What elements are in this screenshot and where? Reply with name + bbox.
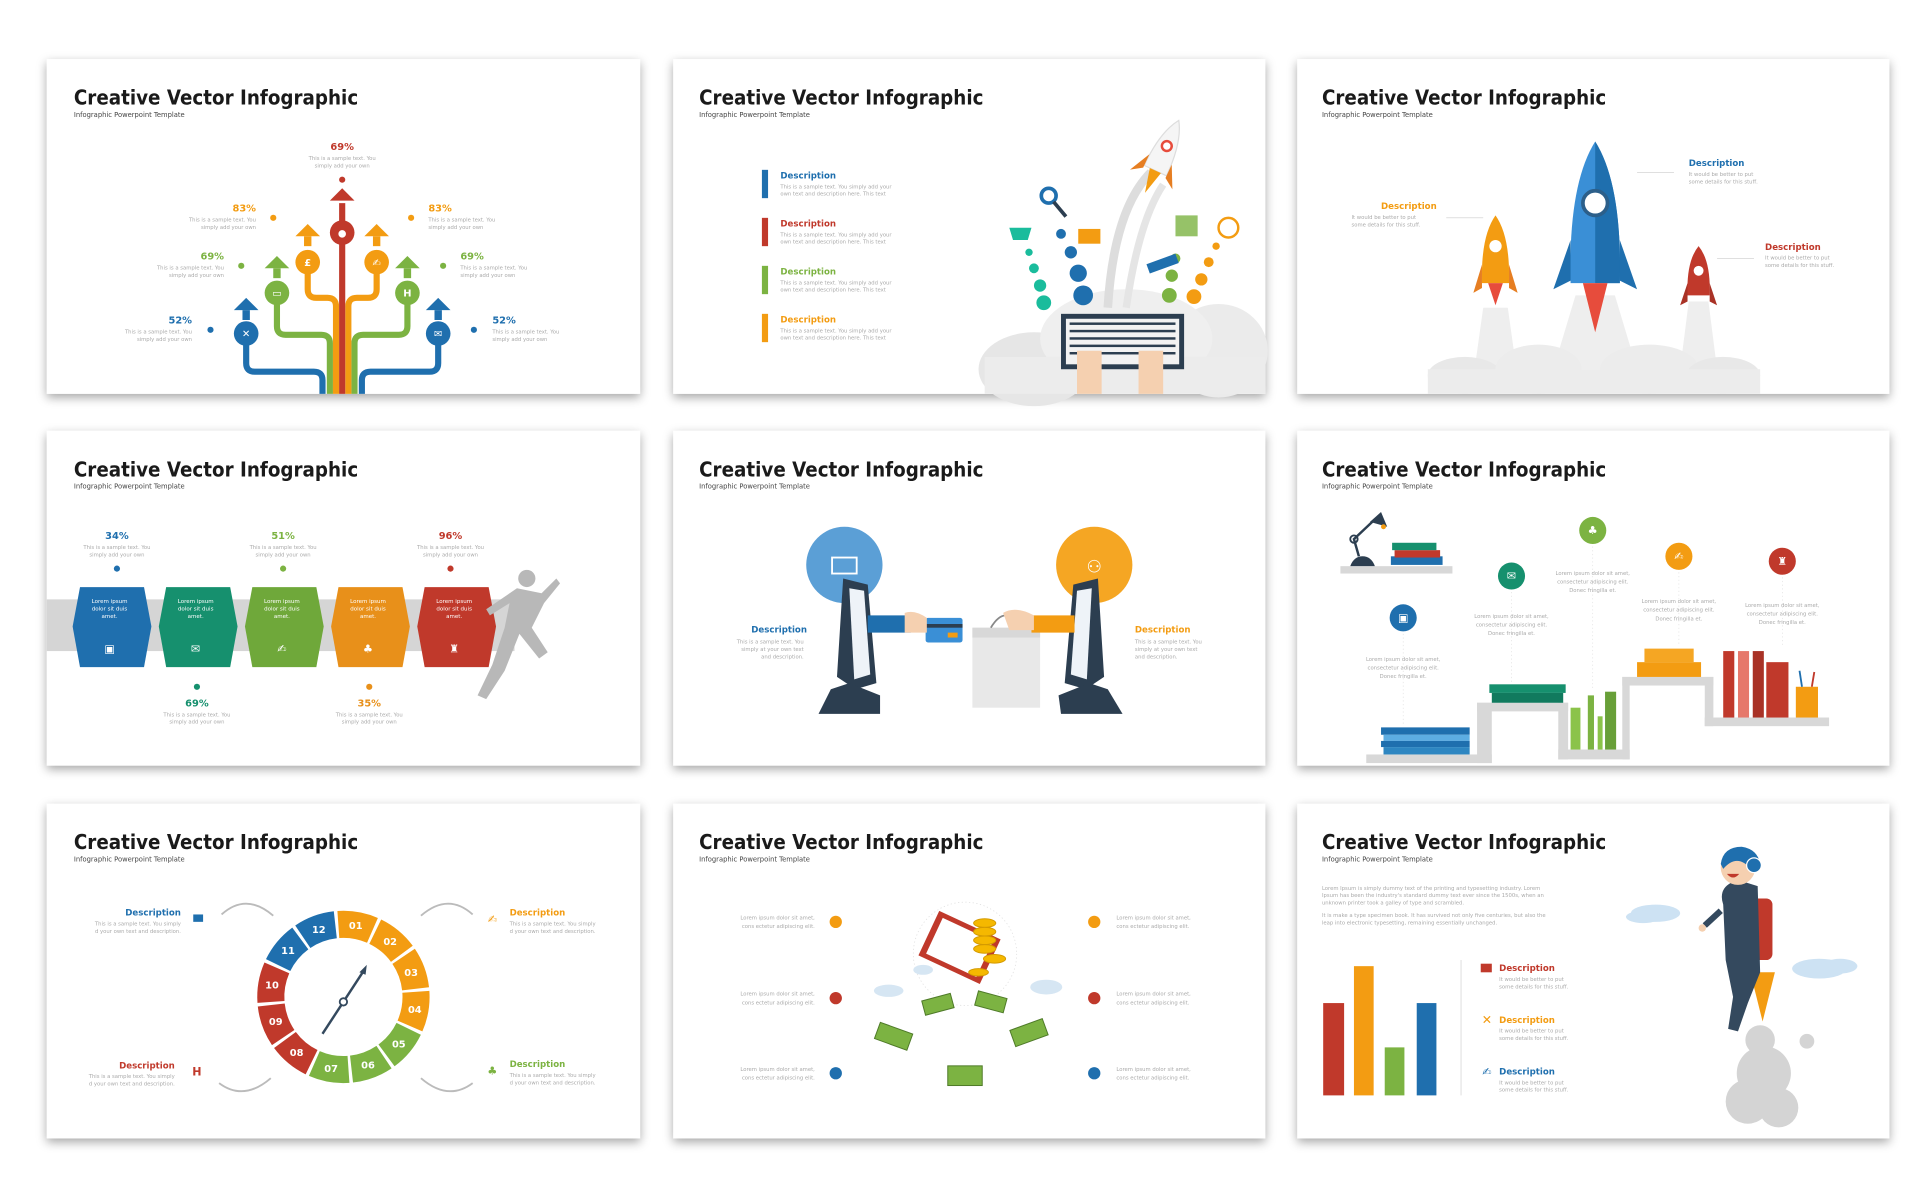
title: Creative Vector Infographic [1322, 457, 1606, 481]
description list: This is a sample text. You simply add your [779, 184, 892, 190]
dots with text: Lorem ipsum dolor sit amet, [1116, 992, 1191, 998]
percentage labels: This is a sample text. You [82, 545, 150, 551]
title: Infographic Powerpoint Template [699, 111, 810, 119]
band with blocks: Lorem ipsum [178, 599, 214, 605]
percentage labels: simply add your own [342, 720, 397, 726]
descriptions: Description [510, 909, 565, 919]
illustration [806, 527, 1132, 714]
descriptions [736, 626, 1202, 660]
percentage labels: 35% [357, 698, 381, 709]
lamp and books [1340, 512, 1452, 574]
labels: percentages: 83% [428, 204, 452, 215]
ring chart: 01 [349, 921, 363, 932]
description list: This is a sample text. You simply add your [779, 280, 892, 286]
band with blocks: dolor sit duis [264, 606, 300, 612]
dots with text: Lorem ipsum dolor sit amet, [740, 992, 815, 998]
icon nodes with text: ♜ [1777, 555, 1787, 568]
slide 1: arrows: H [403, 289, 412, 300]
jetpack man illustration [1626, 847, 1857, 1127]
labels: percentages [124, 142, 559, 343]
descriptions: Description [1381, 202, 1437, 212]
icon nodes with text: Donec fringilla et. [1759, 620, 1806, 626]
icon nodes with text: ✍ [1674, 550, 1684, 563]
band with blocks: amet. [446, 614, 462, 620]
description list: Description [780, 267, 836, 277]
slide 1: arrows: ✍ [373, 258, 381, 269]
slide 7: numbered ring [47, 804, 640, 1138]
band with blocks: dolor sit duis [350, 606, 386, 612]
bar chart [1323, 960, 1461, 1095]
band with blocks: dolor sit duis [92, 606, 127, 612]
descriptions: H [192, 1066, 202, 1079]
step shelves [1366, 677, 1829, 763]
description list: own text and description here. This text [780, 288, 886, 294]
descriptions: simply at your own text [741, 647, 804, 653]
descriptions: It would be better to put [1689, 172, 1753, 178]
title [1322, 86, 1606, 119]
title: Infographic Powerpoint Template [1322, 856, 1433, 864]
ring chart: 04 [408, 1005, 422, 1016]
ring chart: 11 [281, 946, 295, 957]
labels: percentages: simply add your own [137, 337, 192, 343]
paragraph: It is make a type specimen book. It has survived not only five centuries, but also the [1322, 913, 1546, 919]
band with blocks: ✍ [277, 642, 287, 655]
band with blocks: amet. [188, 614, 204, 620]
ring chart: 05 [392, 1039, 406, 1050]
percentage labels [82, 531, 484, 726]
descriptions with icons: ✍ [1482, 1066, 1492, 1079]
dots with text: cons ectetur adipiscing elit. [742, 1075, 815, 1081]
icon nodes with text: consectetur adipiscing elit. [1368, 666, 1439, 672]
title: Infographic Powerpoint Template [1322, 111, 1433, 119]
descriptions with icons: It would be better to put [1499, 977, 1564, 983]
runner silhouette [478, 570, 560, 699]
icon nodes with text: Lorem ipsum dolor sit amet, [1556, 571, 1630, 577]
description list: This is a sample text. You simply add your [779, 328, 892, 334]
icon nodes with text: ▣ [1398, 612, 1408, 625]
percentage labels: simply add your own [423, 552, 478, 558]
band with blocks: Lorem ipsum [92, 599, 127, 605]
descriptions with icons: It would be better to put [1499, 1029, 1564, 1035]
descriptions with icons: some details for this stuff. [1499, 1036, 1569, 1042]
title [1322, 830, 1606, 864]
paragraph: unknown printer took a galley of type and scrambled. [1322, 901, 1464, 907]
band with blocks: amet. [102, 614, 118, 620]
illustration: clipboard, coins, bills [874, 902, 1062, 1086]
description list: own text and description here. This text [780, 240, 886, 246]
band with blocks: Lorem ipsum [350, 599, 386, 605]
band with blocks: dolor sit duis [436, 606, 472, 612]
descriptions: ♣ [487, 1064, 497, 1077]
icon nodes with text: consectetur adipiscing elit. [1747, 611, 1818, 617]
icon nodes with text: Donec fringilla et. [1655, 616, 1703, 622]
descriptions: simply at your own text [1135, 647, 1197, 653]
descriptions with icons: Description [1499, 1016, 1555, 1026]
labels: percentages: 52% [492, 316, 516, 327]
ring chart: 08 [290, 1048, 304, 1059]
description list: own text and description here. This text [780, 192, 886, 198]
percentage labels: This is a sample text. You [416, 545, 484, 551]
description list [762, 170, 892, 342]
slide 5: online shopping [673, 431, 1265, 766]
icon nodes with text: ♣ [1588, 524, 1598, 537]
descriptions: d your own text and description. [510, 1080, 596, 1086]
descriptions: This is a sample text. You [1134, 640, 1202, 646]
descriptions: It would be better to put [1765, 256, 1830, 262]
dots with text: Lorem ipsum dolor sit amet, [740, 1067, 815, 1073]
band with blocks: amet. [274, 614, 290, 620]
percentage labels: simply add your own [256, 552, 311, 558]
slide 4: hexagon runner [47, 431, 640, 766]
title: Infographic Powerpoint Template [74, 856, 185, 864]
percentage labels: This is a sample text. You [335, 712, 403, 718]
labels: percentages: simply add your own [201, 225, 256, 231]
title [1322, 457, 1606, 491]
ring chart: 12 [312, 925, 326, 936]
descriptions with icons: some details for this stuff. [1499, 984, 1569, 990]
ring chart: 10 [265, 980, 279, 991]
ring chart: 07 [324, 1064, 338, 1075]
dots with text: cons ectetur adipiscing elit. [1116, 1000, 1190, 1006]
ring chart [243, 896, 444, 1098]
descriptions: and description. [1135, 654, 1178, 660]
descriptions with icons: ✕ [1482, 1013, 1492, 1027]
slide 9: bar chart and jetpack [1297, 804, 1889, 1138]
descriptions: This is a sample text. You simply [94, 922, 181, 928]
descriptions: This is a sample text. You [736, 640, 804, 646]
description list: Description [780, 171, 836, 181]
labels: percentages: simply add your own [169, 273, 224, 279]
title: Creative Vector Infographic [74, 86, 358, 110]
description list: own text and description here. This text [780, 336, 886, 342]
paragraph: Lorem Ipsum is simply dummy text of the printing and typesetting industry. Lorem [1322, 886, 1540, 892]
slide 1: arrows: ✉ [434, 329, 442, 340]
descriptions: some details for this stuff. [1765, 263, 1834, 269]
labels: percentages: simply add your own [492, 337, 547, 343]
descriptions: Description [510, 1060, 565, 1070]
icon nodes with text: consectetur adipiscing elit. [1557, 579, 1629, 585]
descriptions: This is a sample text. You simply [88, 1074, 175, 1080]
dots with text: Lorem ipsum dolor sit amet, [740, 915, 815, 921]
title: Infographic Powerpoint Template [74, 483, 185, 491]
descriptions with icons: Description [1499, 1067, 1555, 1077]
title: Infographic Powerpoint Template [1322, 483, 1433, 491]
title [699, 830, 983, 864]
descriptions: d your own text and description. [89, 1082, 175, 1088]
descriptions with icons: some details for this stuff. [1499, 1088, 1569, 1094]
icon nodes with text: Donec fringilla et. [1380, 674, 1427, 680]
descriptions: d your own text and description. [510, 929, 596, 935]
percentage labels: simply add your own [89, 552, 144, 558]
ring chart: 03 [404, 968, 418, 979]
paragraph [1322, 886, 1546, 926]
descriptions: Description [1689, 159, 1744, 169]
descriptions: d your own text and description. [95, 929, 181, 935]
labels: percentages: 69% [460, 252, 484, 263]
labels: percentages: 52% [168, 316, 192, 327]
band with blocks: ♜ [449, 642, 459, 655]
descriptions: Description [119, 1061, 175, 1071]
descriptions: Description [1135, 626, 1191, 636]
ring chart: 06 [361, 1060, 375, 1071]
percentage labels: This is a sample text. You [162, 712, 230, 718]
band with blocks: ▣ [104, 642, 115, 655]
title: Creative Vector Infographic [1322, 830, 1606, 854]
slide 1: arrows: £ [304, 258, 311, 269]
band with blocks: Lorem ipsum [264, 599, 300, 605]
labels: percentages: This is a sample text. You [427, 218, 495, 224]
icon nodes with text: Lorem ipsum dolor sit amet, [1366, 657, 1441, 663]
icon nodes with text [1366, 517, 1820, 726]
slide 3: rockets [1297, 59, 1889, 394]
dots with text: Lorem ipsum dolor sit amet, [1116, 1067, 1191, 1073]
title: Infographic Powerpoint Template [699, 856, 810, 864]
slide 8: money [673, 804, 1265, 1138]
descriptions: Description [125, 909, 181, 919]
dots with text: cons ectetur adipiscing elit. [742, 924, 815, 930]
dots with text: Lorem ipsum dolor sit amet, [1116, 915, 1191, 921]
title: Creative Vector Infographic [74, 830, 358, 854]
descriptions: This is a sample text. You simply [509, 922, 596, 928]
labels: percentages: simply add your own [428, 225, 483, 231]
descriptions: Description [1765, 243, 1821, 253]
title: Infographic Powerpoint Template [699, 483, 810, 491]
icon nodes with text: Lorem ipsum dolor sit amet, [1745, 603, 1820, 609]
slide 1: arrows: ● [338, 228, 347, 239]
description list: Description [780, 315, 836, 325]
descriptions: and description. [761, 654, 804, 660]
illustration: keyboard, rocket, clouds [979, 110, 1268, 406]
dots with text: cons ectetur adipiscing elit. [1116, 924, 1190, 930]
band with blocks [47, 587, 515, 667]
descriptions [88, 909, 596, 1088]
illustration: ⚇ [1087, 557, 1102, 577]
band with blocks: dolor sit duis [178, 606, 214, 612]
icon nodes with text: consectetur adipiscing elit. [1476, 622, 1547, 628]
dots with text: cons ectetur adipiscing elit. [742, 1000, 815, 1006]
descriptions [1351, 159, 1834, 269]
descriptions: It would be better to put [1351, 215, 1416, 221]
percentage labels: 51% [271, 531, 295, 542]
labels: percentages: 69% [200, 252, 224, 263]
icon nodes with text: Lorem ipsum dolor sit amet, [1642, 599, 1716, 605]
descriptions: some details for this stuff. [1689, 179, 1758, 185]
labels: percentages: This is a sample text. You [459, 266, 527, 272]
descriptions: some details for this stuff. [1351, 222, 1421, 228]
chart: arrow tree [246, 203, 438, 394]
descriptions with icons [1481, 964, 1569, 1094]
description list: This is a sample text. You simply add your [779, 232, 892, 238]
labels: percentages: This is a sample text. You [491, 330, 559, 336]
slide 2: keyboard [673, 59, 1268, 406]
slide 1: arrows: ▭ [272, 289, 282, 300]
title [699, 457, 983, 491]
title: Creative Vector Infographic [699, 830, 983, 854]
title: Infographic Powerpoint Template [74, 111, 185, 119]
curved arrows [219, 904, 473, 1091]
percentage labels: This is a sample text. You [249, 545, 317, 551]
title [74, 830, 358, 864]
percentage labels: simply add your own [169, 720, 224, 726]
labels: percentages: simply add your own [315, 163, 370, 169]
paragraph: Ipsum has been the industry's standard dummy text ever since the 1500s, when an [1322, 893, 1544, 899]
slide 6: bookshelf steps [1297, 431, 1889, 766]
title [74, 86, 358, 119]
books [1381, 649, 1818, 754]
labels: percentages: 69% [330, 142, 354, 153]
title: Creative Vector Infographic [699, 86, 983, 110]
percentage labels: 96% [439, 531, 462, 542]
icon nodes with text: Lorem ipsum dolor sit amet, [1474, 614, 1549, 620]
title: Creative Vector Infographic [1322, 86, 1606, 110]
labels: percentages: This is a sample text. You [156, 266, 224, 272]
descriptions: This is a sample text. You simply [509, 1073, 596, 1079]
ring chart: 02 [383, 937, 397, 948]
descriptions: Description [751, 626, 807, 636]
band with blocks: ✉ [191, 642, 200, 655]
labels: percentages: This is a sample text. You [188, 218, 256, 224]
descriptions: ✍ [488, 913, 497, 926]
labels: percentages: This is a sample text. You [308, 156, 376, 162]
title [74, 457, 358, 491]
descriptions with icons: It would be better to put [1499, 1080, 1564, 1086]
labels: percentages: 83% [232, 204, 256, 215]
slide 1: arrows: ✕ [242, 329, 250, 340]
percentage labels: 69% [185, 698, 209, 709]
dots with text: cons ectetur adipiscing elit. [1116, 1075, 1190, 1081]
dots with text [740, 915, 1191, 1081]
description list: Description [780, 219, 836, 229]
title [699, 86, 983, 119]
band with blocks: Lorem ipsum [436, 599, 472, 605]
labels: percentages: This is a sample text. You [124, 330, 192, 336]
icon nodes with text: Donec fringilla et. [1569, 588, 1617, 594]
illustration: rockets [1428, 142, 1760, 394]
band with blocks: ♣ [363, 642, 373, 655]
icon nodes with text: consectetur adipiscing elit. [1643, 608, 1715, 614]
icon nodes with text: Donec fringilla et. [1488, 631, 1535, 637]
slide 1: arrows [47, 59, 640, 394]
paragraph: leap into electronic typesetting, remaining essentially unchanged. [1322, 920, 1498, 926]
labels: percentages: simply add your own [460, 273, 515, 279]
percentage labels: 34% [105, 531, 129, 542]
band with blocks: amet. [360, 614, 376, 620]
ring chart: 09 [269, 1017, 283, 1028]
title: Creative Vector Infographic [699, 457, 983, 481]
title: Creative Vector Infographic [74, 457, 358, 481]
descriptions with icons: Description [1499, 964, 1555, 974]
icon nodes with text: ✉ [1507, 570, 1516, 583]
